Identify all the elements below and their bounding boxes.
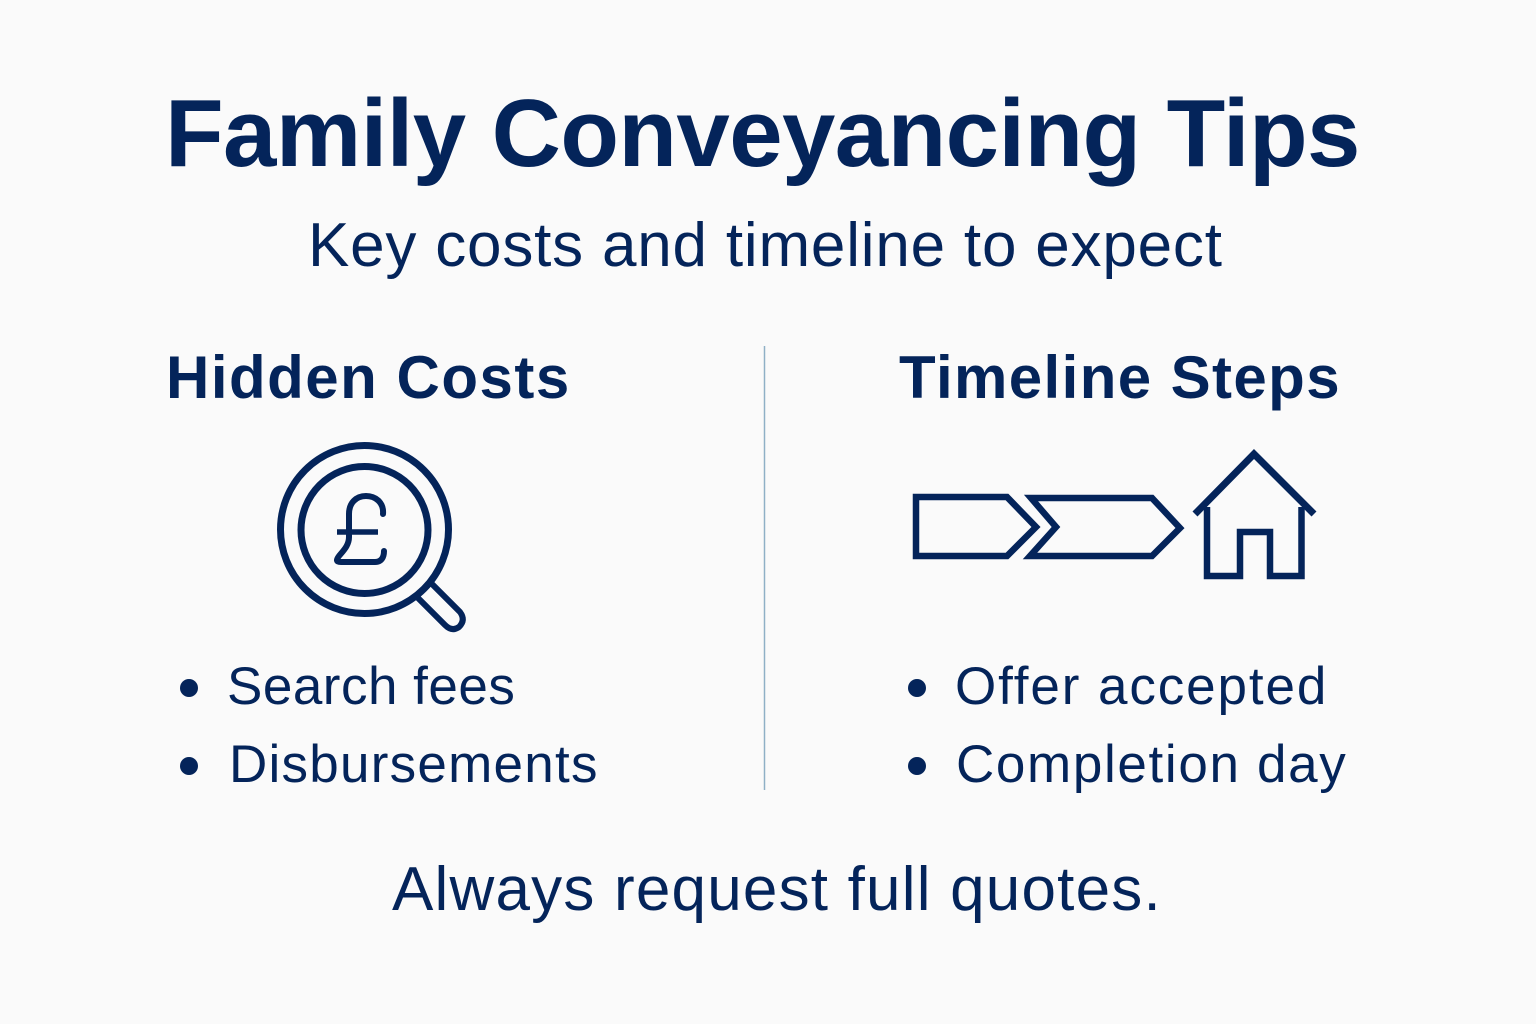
title: Family Conveyancing Tips bbox=[165, 80, 1360, 187]
list: timeline steps bbox=[908, 657, 1347, 794]
subtitle: Key costs and timeline to expect bbox=[308, 211, 1223, 280]
bullet: disbursements: Disbursements bbox=[229, 735, 599, 794]
footer note: Always request full quotes. bbox=[392, 855, 1162, 924]
heading: hidden costs: Hidden Costs bbox=[166, 344, 571, 411]
bullet: completion day: Completion day bbox=[956, 735, 1347, 794]
list: hidden costs bbox=[180, 657, 599, 794]
bullet: search fees: Search fees bbox=[227, 657, 515, 716]
icon: magnifying glass with pound sign bbox=[280, 446, 463, 629]
bullet: offer accepted: Offer accepted bbox=[955, 657, 1328, 716]
heading: timeline steps: Timeline Steps bbox=[899, 344, 1341, 411]
icon: timeline arrows and house bbox=[916, 454, 1314, 576]
